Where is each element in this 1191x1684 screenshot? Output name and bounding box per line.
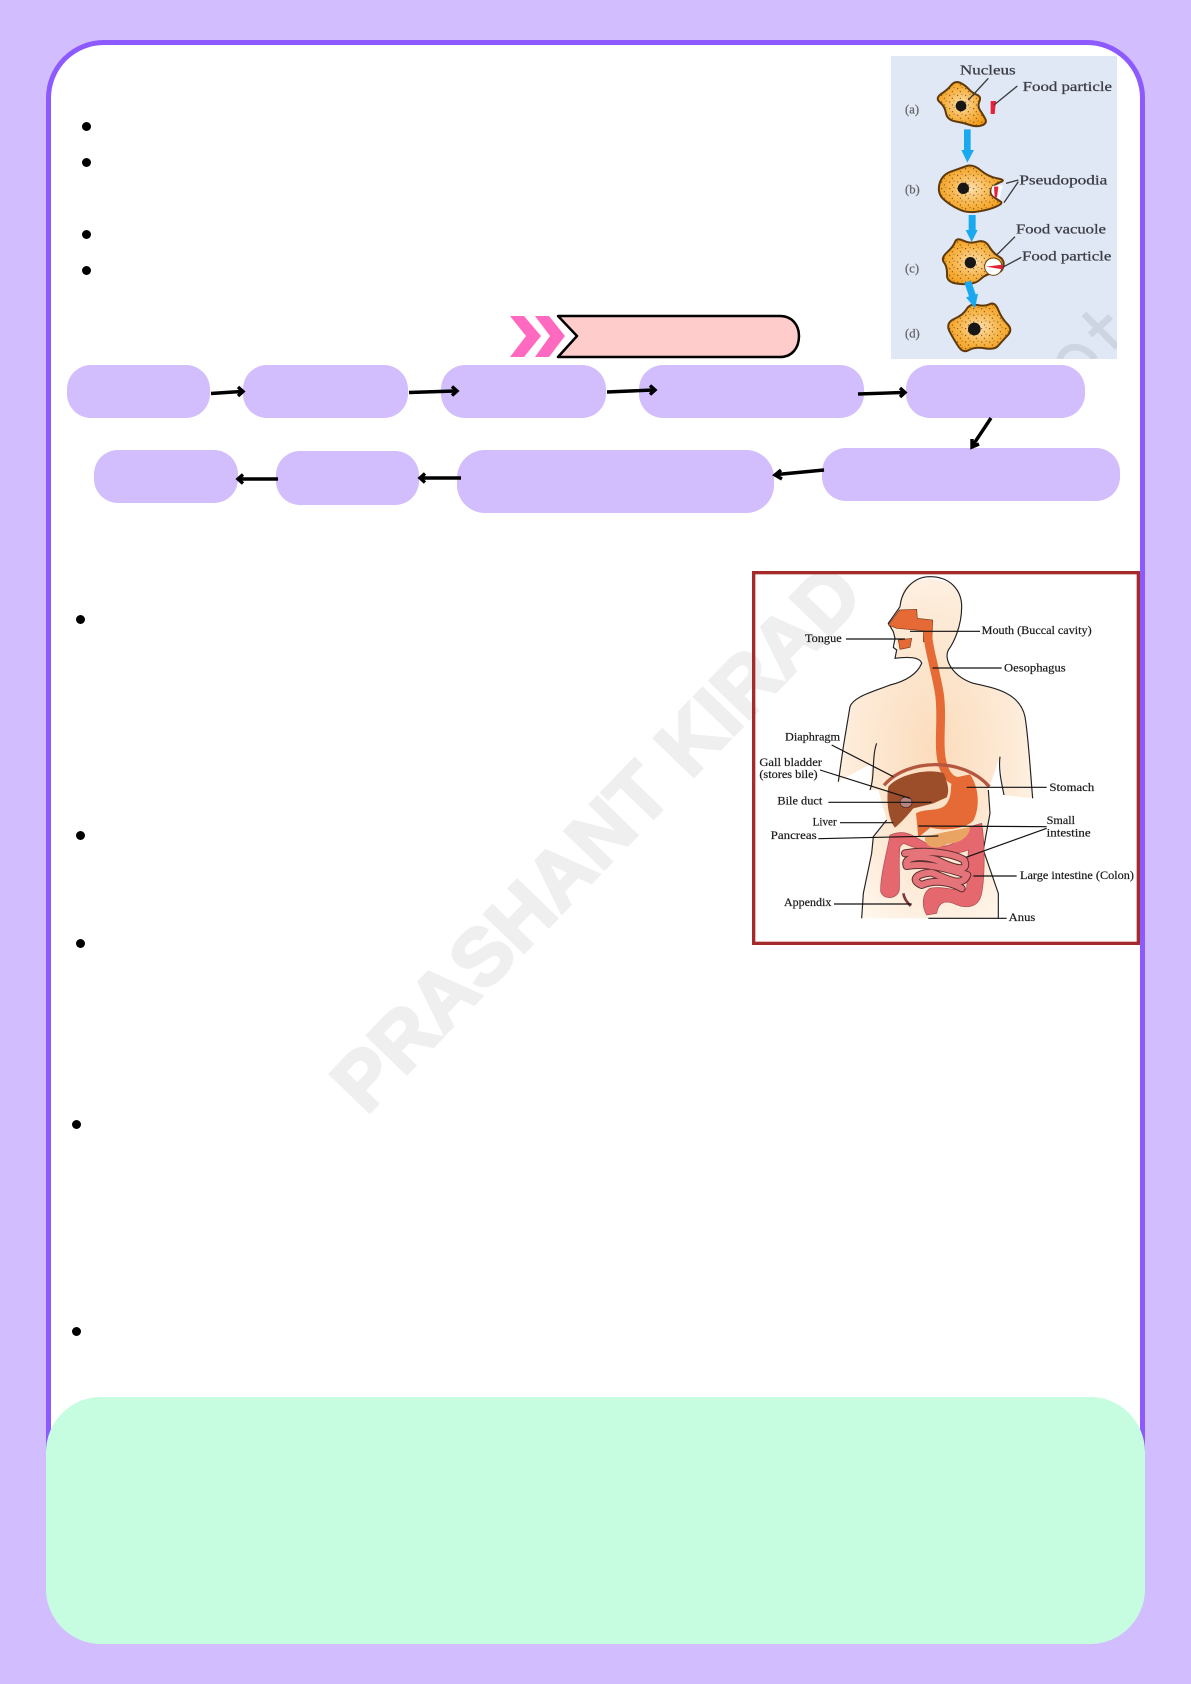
labels: Large intestine (Colon)	[1020, 869, 1134, 882]
labels: (a)	[905, 102, 919, 116]
labels: Gall bladder	[759, 756, 822, 769]
cell a	[938, 82, 996, 126]
flow step 8	[276, 451, 419, 505]
labels: Food particle	[1022, 250, 1111, 265]
labels: (c)	[905, 262, 919, 276]
labels: Small	[1047, 814, 1075, 827]
labels	[759, 624, 1134, 924]
figure: human digestive system	[752, 571, 1140, 945]
labels: Stomach	[1049, 781, 1095, 794]
labels: Mouth (Buccal cavity)	[982, 624, 1092, 637]
labels: intestine	[1047, 827, 1091, 840]
watermark: PRASHANT KIRAD	[314, 548, 878, 1128]
labels: Appendix	[784, 896, 831, 909]
flow step 4	[639, 365, 864, 418]
flow step 7	[457, 450, 774, 513]
cell d	[948, 303, 1010, 351]
bullet list: digestion section	[72, 615, 85, 1336]
chevrons	[510, 316, 565, 357]
mouth and oesophagus	[888, 609, 962, 782]
gall bladder	[900, 797, 912, 808]
labels: Anus	[1009, 911, 1036, 924]
flow step 6	[822, 448, 1120, 501]
labels: Nucleus	[960, 63, 1016, 78]
labels: Bile duct	[777, 795, 823, 808]
figure: nutrition in amoeba	[891, 56, 1117, 359]
labels: Food particle	[1023, 80, 1112, 95]
labels: Tongue	[805, 632, 842, 645]
labels: Pseudopodia	[1019, 174, 1108, 189]
labels: Oesophagus	[1004, 661, 1066, 674]
leader lines	[968, 78, 1021, 267]
blue arrows	[961, 129, 978, 308]
flow step 1	[67, 365, 210, 418]
labels: Liver	[813, 816, 837, 829]
flow step 9	[94, 450, 238, 503]
labels	[905, 63, 1112, 340]
flow step 3	[441, 365, 606, 418]
flow step 2	[243, 365, 408, 418]
diaphragm	[884, 765, 989, 787]
labels: (stores bile)	[759, 768, 818, 781]
cell c	[943, 239, 1004, 284]
stomach	[916, 774, 978, 837]
cell b	[939, 166, 1003, 212]
labels: Diaphragm	[785, 730, 840, 743]
large intestine	[881, 823, 984, 915]
heading banner	[556, 314, 800, 358]
liver	[887, 771, 948, 828]
pancreas	[925, 827, 970, 847]
body silhouette	[838, 579, 1033, 918]
flow step 5	[906, 365, 1085, 418]
panel: green summary box	[46, 1397, 1145, 1644]
labels: (b)	[905, 182, 920, 196]
labels: Food vacuole	[1016, 223, 1106, 238]
labels: (d)	[905, 326, 920, 340]
frame	[754, 573, 1138, 943]
labels: Pancreas	[771, 829, 817, 842]
small intestine	[905, 852, 967, 888]
bullet list: top section	[82, 122, 91, 275]
leader lines	[818, 631, 1047, 918]
appendix	[903, 893, 911, 906]
